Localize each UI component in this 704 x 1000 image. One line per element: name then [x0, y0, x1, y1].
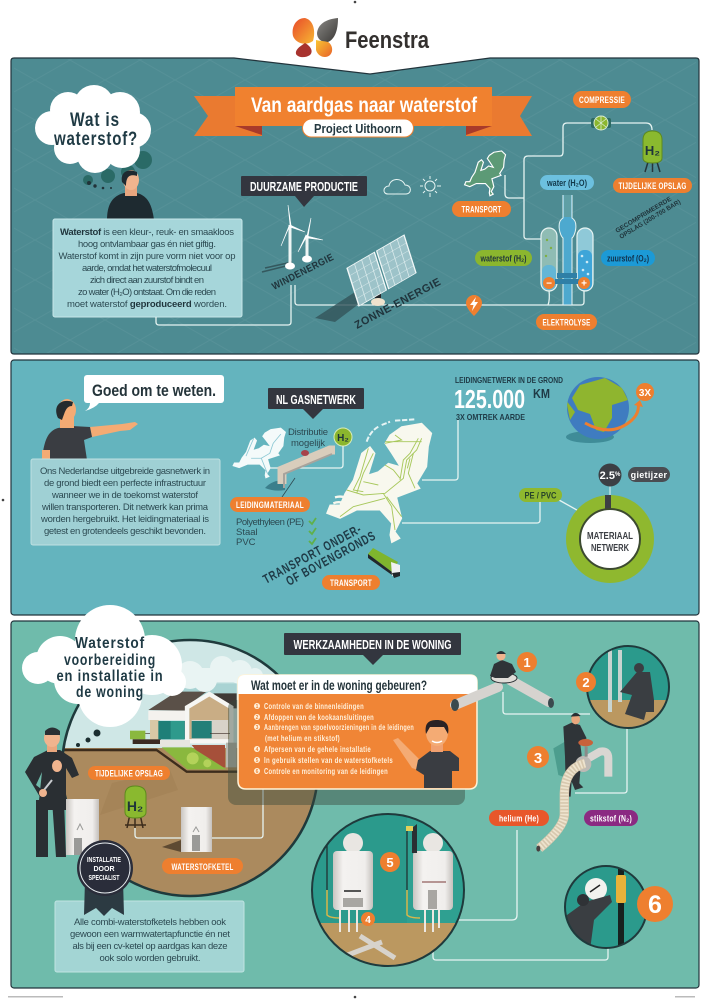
- panel: wat moet er gebeuren: [238, 675, 477, 789]
- text box: combi ketels: Alle combi-waterstofketels hebben ook: [74, 917, 226, 928]
- pipe illustration: [265, 446, 343, 497]
- number 5: [380, 852, 400, 872]
- text box: gasnetwerk: [31, 459, 220, 545]
- pill: stikstof: [584, 810, 638, 826]
- distribution text: Distributie: [288, 427, 328, 438]
- text box: waterstof: moet waterstof geproduceerd worden.: [67, 299, 227, 310]
- distribution text: [288, 427, 328, 449]
- text box: combi ketels: gewoon een warmwatertapfunctie én net: [70, 929, 230, 940]
- cloud: waterstof voorbereiding: de woning: [76, 684, 144, 701]
- electrolysis device: −: [546, 278, 552, 290]
- stat: 2.5 percent: 2.5: [600, 470, 615, 482]
- number 3: 3: [534, 750, 542, 767]
- panel: wat moet er gebeuren: Controle en monitoring van de leidingen: [264, 767, 388, 776]
- label: werkzaamheden: WERKZAAMHEDEN IN DE WONING: [294, 637, 452, 652]
- material list: PVC: [236, 537, 256, 548]
- pill: gietijzer: [628, 467, 670, 482]
- statistic: leidingnetwerk 125.000 km: [454, 375, 563, 422]
- panel 3: installatie in de woning: [11, 605, 699, 988]
- text box: waterstof: Waterstof is een kleur-, reuk- en smaakloos: [60, 227, 234, 238]
- pill: leidingmateriaal: [230, 497, 310, 512]
- icon: hydrogen tank: H₂: [645, 143, 660, 158]
- title ribbon: [194, 87, 532, 137]
- panel 2: goed om te weten: [11, 360, 699, 615]
- solar panel: [315, 235, 416, 322]
- icon: lightning: [466, 295, 482, 316]
- label: windenergie: WINDENERGIE: [270, 252, 336, 293]
- label: werkzaamheden: [284, 633, 461, 665]
- pill: water: water (H₂O): [546, 178, 587, 189]
- circle illustration 2: [587, 646, 669, 730]
- person pointing: [42, 399, 138, 460]
- cloud: waterstof voorbereiding: en installatie in: [56, 668, 164, 685]
- pill: tijdelijke opslag: TIJDELIJKE OPSLAG: [95, 768, 163, 778]
- lines steps: [373, 692, 627, 960]
- panel: wat moet er gebeuren: Aanbrengen van spoelvoorzieningen in de leidingen: [264, 723, 414, 732]
- number 2: 2: [582, 675, 590, 690]
- speech bubble: Goed om te weten.: [92, 381, 216, 400]
- connector lines map: [402, 420, 584, 523]
- icon: truck: [368, 548, 400, 578]
- pill: tijdelijke opslag: [613, 178, 692, 193]
- worker with wrench: [25, 728, 79, 857]
- text box: gasnetwerk: getest en grotendeels geschikt bevonden.: [44, 526, 206, 537]
- statistic: leidingnetwerk 125.000 km: 125.000: [454, 384, 525, 414]
- pill: pe pvc: [519, 488, 562, 502]
- text box: waterstof: hoog ontvlambaar gas én niet giftig.: [78, 239, 216, 250]
- badge: installatie door specialist: INSTALLATIE: [87, 857, 121, 864]
- logo: Feenstra: [293, 18, 430, 57]
- icon: cloud: [384, 179, 410, 194]
- text box: waterstof: zich direct aan zuurstof bindt en: [90, 275, 204, 286]
- panel: wat moet er gebeuren: 2: [256, 715, 259, 721]
- pill: waterstof: [475, 250, 532, 266]
- title ribbon: Project Uithoorn: [314, 121, 402, 136]
- circle illustration 6: [565, 866, 647, 950]
- pill: compressie: COMPRESSIE: [579, 95, 625, 105]
- pill: water: [540, 175, 594, 190]
- panel: wat moet er gebeuren: Controle van de binnenleidingen: [264, 702, 364, 711]
- number 6: 6: [648, 891, 662, 919]
- distribution text: mogelijk: [291, 438, 325, 449]
- number 2: [576, 672, 596, 692]
- text box: gasnetwerk: willen transporteren. Dit netwerk kan prima: [41, 502, 209, 513]
- pipe with worker 1: [451, 651, 554, 711]
- statistic: leidingnetwerk 125.000 km: 3X OMTREK AARDE: [456, 412, 525, 422]
- icon: hydrogen tank: H₂: [127, 798, 143, 814]
- text box: gasnetwerk: de grond biedt een perfecte infrastructuur: [44, 478, 206, 489]
- cloud: wat is waterstof: waterstof?: [53, 129, 138, 150]
- text box: combi ketels: [55, 901, 244, 972]
- text box: waterstof: zo water (H₂O) ontstaat. Om die reden: [78, 287, 216, 298]
- panel: wat moet er gebeuren: Afdoppen van de kookaansluitingen: [264, 713, 374, 722]
- big netherlands gas network map: [327, 419, 432, 543]
- pill: transport: TRANSPORT: [462, 204, 502, 214]
- number 1: [517, 652, 537, 672]
- pill: transport: [452, 201, 511, 217]
- number 1: 1: [523, 655, 531, 670]
- pill: waterstofketel: WATERSTOFKETEL: [172, 862, 234, 872]
- connection lines production: [156, 123, 652, 325]
- label: nl gasnetwerk: [268, 388, 364, 419]
- wind turbines: [262, 205, 323, 272]
- small netherlands map: [232, 428, 286, 479]
- text box: combi ketels: ook solo worden gebruikt.: [100, 953, 200, 964]
- cloud: wat is waterstof: [35, 85, 152, 189]
- man in task box: [393, 720, 459, 788]
- panel: wat moet er gebeuren: 5: [256, 758, 259, 764]
- line: tank to boiler: [135, 785, 263, 838]
- boiler centre: [162, 807, 212, 852]
- label: zonne-energie: ZONNE-ENERGIE: [353, 276, 443, 332]
- pill: zuurstof: zuurstof (O₂): [607, 254, 649, 264]
- icon: globe: [566, 377, 654, 443]
- panel: wat moet er gebeuren: 4: [256, 747, 259, 753]
- pill: zuurstof: [601, 250, 655, 266]
- badge: installatie door specialist: SPECIALIST: [88, 875, 120, 882]
- pill: transport: [322, 575, 380, 590]
- donut chart: materiaal netwerk: NETWERK: [591, 542, 629, 554]
- pill: elektrolyse: ELEKTROLYSE: [542, 318, 590, 328]
- statistic: leidingnetwerk 125.000 km: KM: [533, 386, 550, 401]
- pill: leidingmateriaal: LEIDINGMATERIAAL: [236, 500, 304, 510]
- number 6: [637, 886, 673, 922]
- rotated label: transport onder- of bovengronds: OF BOVENGRONDS: [283, 528, 378, 589]
- cloud: waterstof voorbereiding: Waterstof: [75, 635, 145, 652]
- icon: h2 circle: [334, 428, 352, 446]
- material list: Staal: [236, 527, 258, 538]
- donut chart: materiaal netwerk: MATERIAAL: [587, 530, 633, 542]
- pill: gietijzer: gietijzer: [631, 470, 668, 480]
- panel: wat moet er gebeuren: 3: [256, 725, 259, 731]
- icon: hydrogen tank: [125, 786, 146, 828]
- text box: waterstof: aarde, omdat het waterstofmolecuul: [82, 263, 212, 274]
- text box: gasnetwerk: worden hergebruikt. Het leidingmateriaal is: [40, 514, 209, 525]
- panel: wat moet er gebeuren: Wat moet er in de woning gebeuren?: [251, 677, 427, 693]
- text box: gasnetwerk: wanneer we in de toekomst waterstof: [51, 490, 198, 501]
- logo: Feenstra: Feenstra: [345, 27, 430, 54]
- rotated label: gecomprimeerde opslag: GECOMPRIMEERDE: [614, 195, 673, 235]
- title ribbon: Van aardgas naar waterstof: [251, 94, 478, 117]
- pill: helium: [489, 810, 549, 826]
- panel: wat moet er gebeuren: In gebruik stellen van de waterstofketels: [264, 756, 393, 765]
- electrolysis device: [541, 195, 593, 305]
- rotated label: transport onder- of bovengronds: [260, 521, 378, 589]
- netherlands map small: [465, 151, 506, 196]
- stat: 2.5 percent: [598, 464, 622, 495]
- pill: elektrolyse: [536, 314, 597, 330]
- cloud: waterstof voorbereiding: voorbereiding: [64, 652, 156, 669]
- text box: waterstof: Waterstof komt in zijn pure vorm niet voor op: [58, 251, 236, 262]
- pill: waterstof: waterstof (H₂): [480, 254, 526, 264]
- material list: [236, 517, 316, 548]
- stat: 2.5 percent: %: [615, 472, 621, 478]
- donut chart: materiaal netwerk: [566, 495, 654, 583]
- panel: wat moet er gebeuren: (met helium en stikstof): [265, 734, 340, 743]
- pill: tijdelijke opslag: [88, 766, 170, 780]
- pill: transport: TRANSPORT: [330, 578, 372, 588]
- badge: installatie door specialist: DOOR: [94, 866, 114, 873]
- panel: wat moet er gebeuren: Afpersen van de gehele installatie: [264, 745, 371, 754]
- rotated label: gecomprimeerde opslag: OPSLAG (200-700 BAR): [618, 199, 682, 241]
- text box: waterstof: [53, 219, 242, 317]
- pill: waterstofketel: [162, 858, 243, 874]
- text box: gasnetwerk: Ons Nederlandse uitgebreide gasnetwerk in: [40, 466, 210, 477]
- panel: wat moet er gebeuren: 6: [256, 769, 259, 775]
- speech bubble: [84, 375, 224, 411]
- statistic: leidingnetwerk 125.000 km: LEIDINGNETWERK IN DE GROND: [455, 375, 563, 385]
- shadow under task box: [228, 700, 465, 805]
- pill: compressie: [573, 91, 631, 108]
- icon: sun: [420, 176, 441, 197]
- icon: compressor: [591, 116, 611, 130]
- pill: pe pvc: PE / PVC: [524, 490, 557, 500]
- boiler left: [66, 799, 99, 855]
- pill: helium: helium (He): [499, 814, 539, 824]
- person thinking: [107, 170, 154, 220]
- panel 1: van aardgas naar waterstof: [11, 58, 699, 354]
- material list: Polyethyleen (PE): [236, 517, 304, 528]
- label: nl gasnetwerk: NL GASNETWERK: [276, 392, 356, 407]
- number 3: [527, 746, 549, 768]
- round house scene: [60, 638, 320, 898]
- badge: installatie door specialist: [77, 840, 133, 916]
- icon: globe: 3X: [639, 388, 651, 399]
- cloud: waterstof voorbereiding: [22, 605, 263, 747]
- icon: h2 circle: H₂: [337, 433, 349, 444]
- number 4: 4: [365, 915, 371, 926]
- electrolysis device: +: [581, 278, 587, 290]
- rotated label: transport onder- of bovengronds: TRANSPORT ONDER-: [260, 521, 364, 587]
- number 5: 5: [386, 855, 394, 870]
- icon: hydrogen tank: [643, 131, 662, 172]
- panel: wat moet er gebeuren: 1: [256, 704, 259, 710]
- label: duurzame productie: DUURZAME PRODUCTIE: [250, 179, 358, 194]
- text box: combi ketels: als bij een cv-ketel op aardgas kan deze: [72, 941, 228, 952]
- pill: stikstof: stikstof (N₂): [590, 814, 632, 824]
- cloud: wat is waterstof: Wat is: [70, 110, 120, 131]
- label: duurzame productie: [241, 176, 367, 207]
- number 4: [361, 912, 375, 926]
- worker 3 with valve and hose: [536, 713, 608, 852]
- circle illustration 4 and 5: boilers: [312, 813, 467, 968]
